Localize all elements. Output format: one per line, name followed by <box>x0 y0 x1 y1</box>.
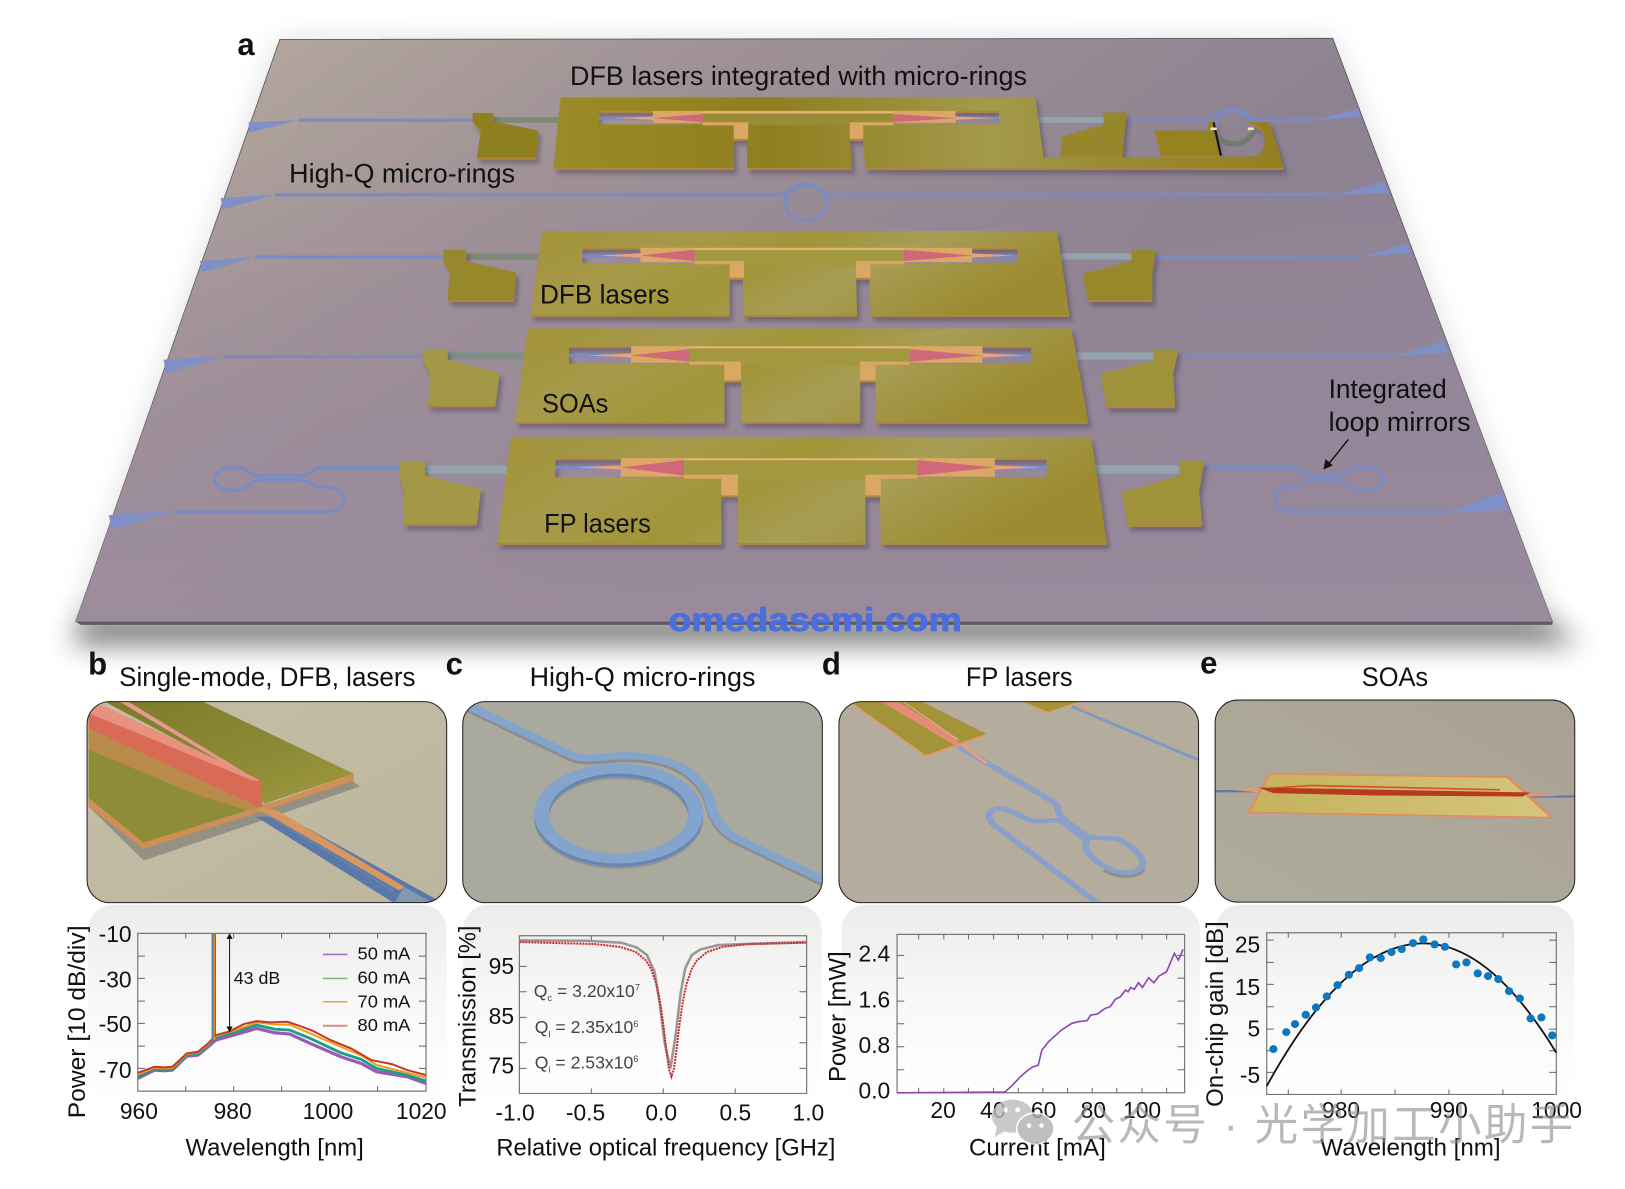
device row: SOAs <box>164 329 1449 422</box>
plot d curve and frame <box>897 934 1185 1093</box>
axis title c x: Relative optical frequency [GHz] <box>496 1135 835 1162</box>
Q values: 6 <box>633 1019 638 1029</box>
watermark: omedasemi.com: omedasemi.com <box>668 602 962 639</box>
tick labels d: 1.6 <box>859 986 890 1012</box>
plot b curves and frame <box>138 933 426 1091</box>
tick labels e: 990 <box>1430 1097 1468 1123</box>
waveguide row 4 <box>223 355 1394 358</box>
axis title b y: Power [10 dB/div] <box>64 925 91 1118</box>
panel c: micro-ring render <box>463 702 826 903</box>
arrowheads 43 dB <box>226 933 233 1032</box>
tick labels c: 0.5 <box>719 1099 751 1125</box>
chart b: laser spectra <box>64 921 447 1162</box>
legend b: 80 mA <box>358 1015 411 1035</box>
plate shadow <box>70 38 1580 645</box>
tick labels d: 2.4 <box>859 941 890 967</box>
panel d: FP laser render <box>839 700 1199 907</box>
reflections under panels <box>88 905 1574 1102</box>
tick labels d <box>859 941 1161 1123</box>
Q values: = 2.53x10 <box>551 1052 633 1072</box>
tick labels d: 20 <box>930 1097 956 1123</box>
panel b heading: Single-mode, DFB, lasers <box>119 662 416 692</box>
label: Integrated loop mirrors <box>1329 374 1471 437</box>
chart e: on-chip gain <box>1202 921 1582 1162</box>
panel b: DFB laser render <box>87 701 447 903</box>
panel e heading: e <box>1200 646 1217 681</box>
tick labels e: 1000 <box>1531 1097 1582 1123</box>
watermark: WeChat icon <box>992 1100 1054 1144</box>
panel a: chip plate <box>76 38 1552 625</box>
arrow to loop mirror <box>1323 439 1348 469</box>
waveguide row 1 <box>298 111 1314 120</box>
Q values: Q <box>535 1052 548 1072</box>
label: DFB lasers: DFB lasers <box>540 280 669 310</box>
tick labels d: 0.8 <box>859 1032 890 1058</box>
tick labels e: 5 <box>1248 1015 1260 1041</box>
tick labels c: 95 <box>489 953 514 979</box>
Q values: = 2.35x10 <box>551 1017 633 1037</box>
right loop mirror <box>1204 467 1449 512</box>
waveguide row 3 <box>255 256 1360 259</box>
panel e heading <box>1200 646 1428 692</box>
plot c curves and frame <box>519 936 807 1093</box>
axis title c y: Transmission [%] <box>455 925 482 1107</box>
tick labels c <box>489 953 824 1125</box>
axis title e x: Wavelength [nm] <box>1320 1135 1501 1162</box>
legend b <box>358 944 411 1035</box>
axis title d x: Current [mA] <box>969 1135 1106 1162</box>
panel e: SOA render <box>1215 700 1575 902</box>
Q values: i <box>548 1065 551 1075</box>
chart d: power vs current <box>825 934 1185 1162</box>
tick labels c: 1.0 <box>793 1099 824 1125</box>
tick labels d: 40 <box>980 1097 1005 1123</box>
panel c heading: c <box>446 647 463 682</box>
device row: high-Q micro-ring <box>221 181 1389 221</box>
chart c: transmission <box>455 925 835 1162</box>
ring and bus <box>275 184 1337 195</box>
legend b: 70 mA <box>358 991 411 1011</box>
legend b: 60 mA <box>358 967 411 987</box>
Q values: 7 <box>635 983 640 993</box>
tick labels d: 0.0 <box>859 1078 890 1104</box>
tick labels d: 80 <box>1081 1097 1106 1123</box>
Q values <box>534 981 640 1075</box>
Q values: Q <box>535 1017 548 1037</box>
device row: DFB lasers with micro-rings <box>249 97 1361 168</box>
tick labels c: -0.5 <box>566 1099 605 1125</box>
device row: FP lasers with loop mirrors <box>109 437 1508 543</box>
panel d heading: d <box>822 647 841 682</box>
panel d heading <box>822 647 1073 692</box>
watermark: WeChat account text: 公众号 · 光学加工小助手 <box>1072 1102 1573 1150</box>
panel b heading <box>88 647 416 692</box>
tick labels d: 60 <box>1031 1097 1056 1123</box>
label: High-Q micro-rings: High-Q micro-rings <box>289 158 515 188</box>
tick labels b: -10 <box>99 921 132 947</box>
panel b heading: b <box>88 647 107 682</box>
panel c heading: High-Q micro-rings <box>530 662 756 692</box>
tick labels b: -30 <box>99 967 132 993</box>
axis title e y: On-chip gain [dB] <box>1202 921 1229 1107</box>
Q values: l <box>548 1029 551 1039</box>
tick labels e: -5 <box>1240 1062 1260 1088</box>
label a: a <box>237 27 255 62</box>
label: FP lasers: FP lasers <box>544 509 651 539</box>
axis title d y: Power [mW] <box>825 951 852 1082</box>
tick labels e: 980 <box>1322 1097 1360 1123</box>
legend b: 50 mA <box>358 944 411 964</box>
tick labels b: 980 <box>214 1098 252 1124</box>
tick labels c: 0.0 <box>645 1099 677 1125</box>
tick labels b: 1000 <box>303 1098 353 1124</box>
label: Integrated loop mirrors: loop mirrors <box>1329 407 1471 437</box>
Q values: 6 <box>633 1054 638 1064</box>
tick labels b: -50 <box>99 1011 132 1037</box>
tick labels b <box>99 921 447 1124</box>
Q values: = 3.20x10 <box>552 981 635 1001</box>
tick labels c: 85 <box>489 1003 514 1029</box>
heading: DFB lasers integrated with micro-rings: DFB lasers integrated with micro-rings <box>570 61 1027 91</box>
device row: DFB lasers <box>200 231 1412 315</box>
axis title b x: Wavelength [nm] <box>186 1135 364 1162</box>
tick labels c: -1.0 <box>495 1099 535 1125</box>
panel d heading: FP lasers <box>966 662 1073 692</box>
plot e curve, points and frame <box>1267 933 1556 1094</box>
tick labels e <box>1235 931 1582 1123</box>
tick labels c: 75 <box>489 1053 514 1079</box>
tick labels d: 100 <box>1123 1097 1161 1123</box>
left loop mirror <box>174 467 399 512</box>
label: Integrated loop mirrors: Integrated <box>1329 374 1447 404</box>
Q values: c <box>547 993 552 1003</box>
tick labels b: 1020 <box>396 1098 447 1124</box>
panel e heading: SOAs <box>1362 662 1428 692</box>
panel c heading <box>446 647 756 692</box>
tick labels e: 15 <box>1235 974 1260 1000</box>
tick labels b: 960 <box>120 1098 158 1124</box>
annotation 43 dB: 43 dB <box>234 968 280 988</box>
tick labels b: -70 <box>99 1057 132 1083</box>
tick labels e: 25 <box>1235 931 1260 957</box>
Q values: Q <box>534 981 547 1001</box>
label: SOAs: SOAs <box>542 388 608 418</box>
